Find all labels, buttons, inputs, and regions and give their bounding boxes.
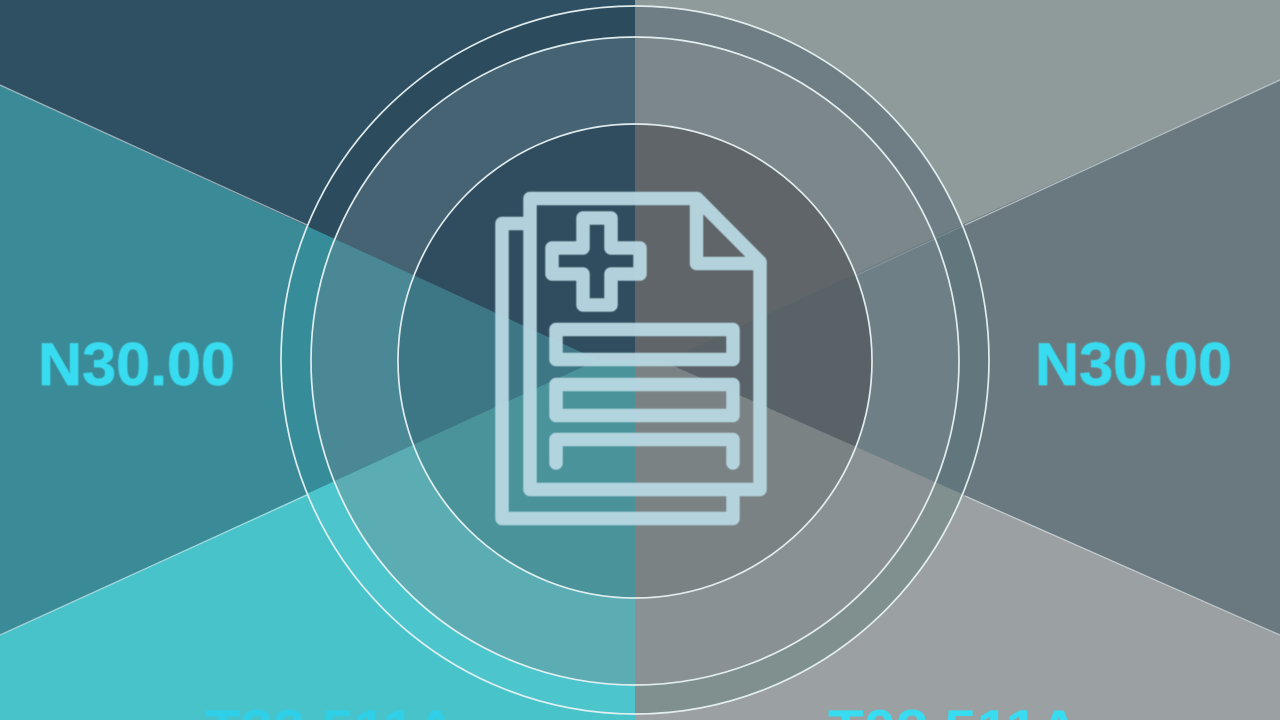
icon: medical document — [502, 198, 760, 518]
panel: inner circle — [399, 124, 872, 597]
right price: N30.00 — [1035, 331, 1232, 398]
icon part: back page — [502, 224, 733, 518]
panel: middle ring band — [312, 38, 958, 684]
icon part: first text bar — [556, 330, 733, 360]
icon part: second text bar — [556, 384, 733, 416]
icon part: third text bar — [556, 440, 733, 463]
icon part: medical cross — [552, 218, 640, 305]
icon part: folded corner — [696, 199, 760, 264]
concentric circle outlines — [281, 6, 989, 714]
sector divider lines — [0, 80, 1280, 635]
icon part: front page — [530, 198, 760, 490]
left price: N30.00 — [38, 331, 235, 398]
panel: outer ring band — [308, 6, 962, 713]
